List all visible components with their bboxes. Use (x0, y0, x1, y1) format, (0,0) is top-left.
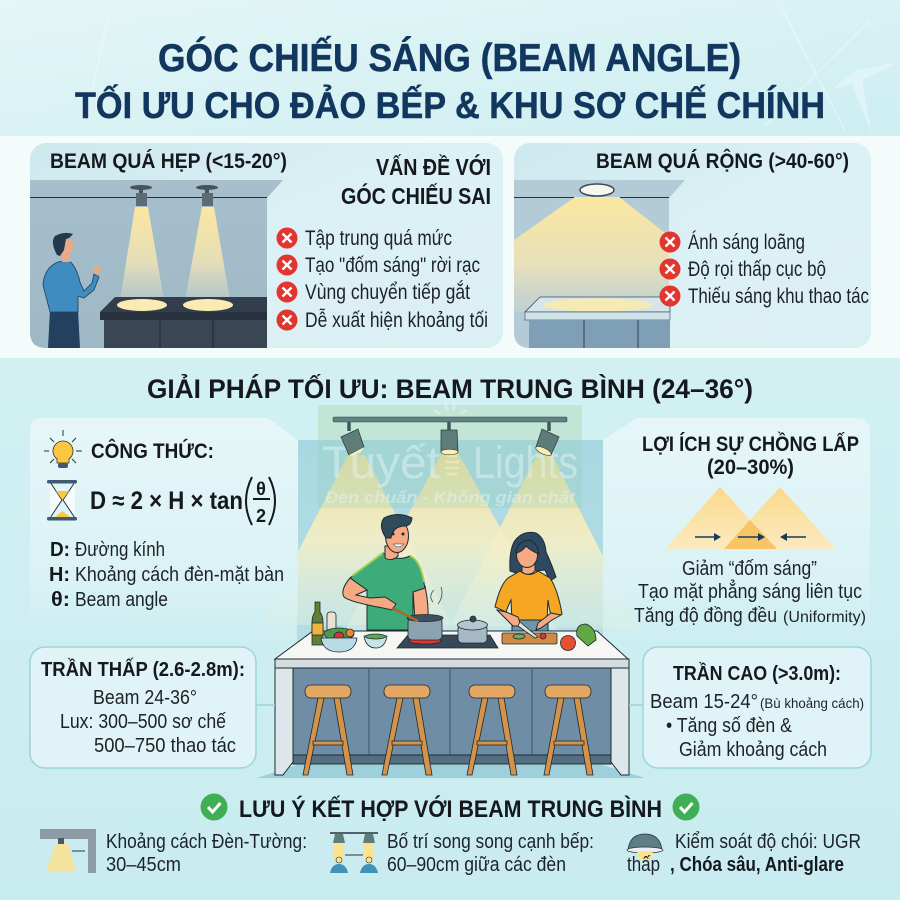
formula (90, 477, 275, 526)
heading: wrong angle problems: VẤN ĐỀ VỚI (376, 153, 491, 180)
watermark: Đèn chuẩn - Không gian chất (325, 488, 576, 507)
figure: man cooking (343, 514, 428, 630)
formula legend: H: (49, 564, 70, 586)
list: narrow beam problems: Tạo "đốm sáng" rời rạc (305, 254, 480, 277)
benefits list: Giảm “đốm sáng” (682, 557, 817, 580)
benefits list (634, 557, 866, 627)
benefits list: Tạo mặt phẳng sáng liên tục (638, 579, 862, 603)
heading: beam too wide: BEAM QUÁ RỘNG (>40-60°) (596, 149, 849, 173)
note: glare control: Kiểm soát độ chói: UGR (675, 831, 861, 853)
note: glare control: , Chóa sâu, Anti-glare (670, 854, 844, 876)
formula legend (49, 539, 284, 611)
callout: high ceiling: • Tăng số đèn & (666, 715, 793, 737)
formula legend: D: (50, 539, 70, 561)
benefits list: Tăng độ đồng đều (634, 604, 777, 627)
watermark: Lights (473, 437, 578, 488)
note: glare control: thấp (627, 854, 660, 876)
formula: θ (256, 479, 266, 499)
panel: overlap benefits (603, 418, 870, 640)
figure: man pointing (43, 233, 101, 348)
panel: formula (30, 418, 298, 640)
list: wide beam problems: Ánh sáng loãng (688, 231, 805, 254)
callout: high ceiling: Giảm khoảng cách (679, 739, 827, 761)
connector lines (256, 704, 643, 706)
formula: D ≈ 2 × H × tan (90, 487, 243, 515)
formula: 2 (256, 506, 266, 526)
panel: beam too narrow (30, 143, 503, 348)
illustration: wide beam scene (514, 180, 685, 348)
illustration: narrow beam scene (30, 180, 283, 348)
list: narrow beam problems: Dễ xuất hiện khoảng tối (305, 309, 488, 332)
formula legend: Beam angle (75, 589, 168, 611)
cooking items on counter (312, 587, 596, 652)
formula legend: Đường kính (75, 539, 165, 561)
icon: deep reflector (627, 834, 663, 861)
title: TỐI ƯU CHO ĐẢO BẾP & KHU SƠ CHẾ CHÍNH (75, 84, 825, 126)
kitchen island (275, 631, 629, 775)
list: wide beam problems (660, 231, 869, 308)
note: parallel layout (330, 831, 594, 876)
heading: wrong angle problems: GÓC CHIẾU SAI (341, 182, 491, 209)
track light (333, 417, 567, 457)
formula legend: θ: (51, 589, 70, 611)
note: wall distance (40, 829, 307, 876)
list: wide beam problems: Độ rọi thấp cục bộ (688, 258, 826, 281)
callout: low ceiling: TRẦN THẤP (2.6-2.8m): (41, 658, 245, 681)
heading: formula: CÔNG THỨC: (91, 439, 214, 463)
icon: hourglass (47, 480, 77, 520)
list: narrow beam problems: Tập trung quá mức (305, 227, 452, 250)
callout: low ceiling: 500–750 thao tác (94, 735, 236, 757)
kitchen room backdrop (257, 405, 645, 778)
callout: high ceiling: TRẦN CAO (>3.0m): (673, 662, 841, 685)
note: wall distance: 30–45cm (106, 854, 181, 876)
note: wall distance: Khoảng cách Đèn-Tường: (106, 831, 307, 853)
callout: high ceiling: Beam 15-24° (650, 691, 758, 713)
heading: overlap benefits (642, 432, 859, 479)
title (75, 36, 825, 126)
icon: wall light (40, 829, 96, 873)
formula legend: Khoảng cách đèn-mặt bàn (75, 564, 284, 586)
list: narrow beam problems (276, 227, 488, 332)
callout: low ceiling (30, 647, 256, 768)
heading: wrong angle problems (341, 153, 491, 209)
benefits list: (Uniformity) (783, 609, 866, 626)
note: glare control (627, 831, 861, 876)
list: narrow beam problems: Vùng chuyển tiếp gắt (305, 281, 470, 304)
watermark (322, 402, 578, 507)
note: parallel layout: Bố trí song song cạnh bếp: (387, 831, 594, 853)
diagram: overlapping beams (665, 487, 836, 549)
stools (303, 685, 593, 775)
callout: high ceiling (643, 647, 871, 768)
heading: optimal solution: GIẢI PHÁP TỐI ƯU: BEAM TRUNG BÌNH (24–36°) (147, 372, 753, 404)
watermark: Tuyết (322, 437, 441, 488)
icon: light bulb (44, 430, 82, 468)
heading: overlap benefits: LỢI ÍCH SỰ CHỒNG LẤP (642, 432, 859, 456)
callout: low ceiling: Lux: 300–500 sơ chế (60, 711, 226, 733)
icon: parallel lights (330, 833, 378, 873)
note: parallel layout: 60–90cm giữa các đèn (387, 854, 566, 876)
heading: overlap benefits: (20–30%) (707, 456, 794, 479)
heading: notes: LƯU Ý KẾT HỢP VỚI BEAM TRUNG BÌNH (239, 795, 662, 823)
heading: beam too narrow: BEAM QUÁ HẸP (<15-20°) (50, 150, 287, 173)
light beams (260, 440, 640, 630)
callout: low ceiling: Beam 24-36° (93, 687, 197, 709)
title: GÓC CHIẾU SÁNG (BEAM ANGLE) (158, 36, 741, 80)
figure: woman cutting (495, 532, 562, 632)
callout: high ceiling: (Bù khoảng cách) (760, 695, 864, 711)
panel: beam too wide (514, 143, 871, 348)
